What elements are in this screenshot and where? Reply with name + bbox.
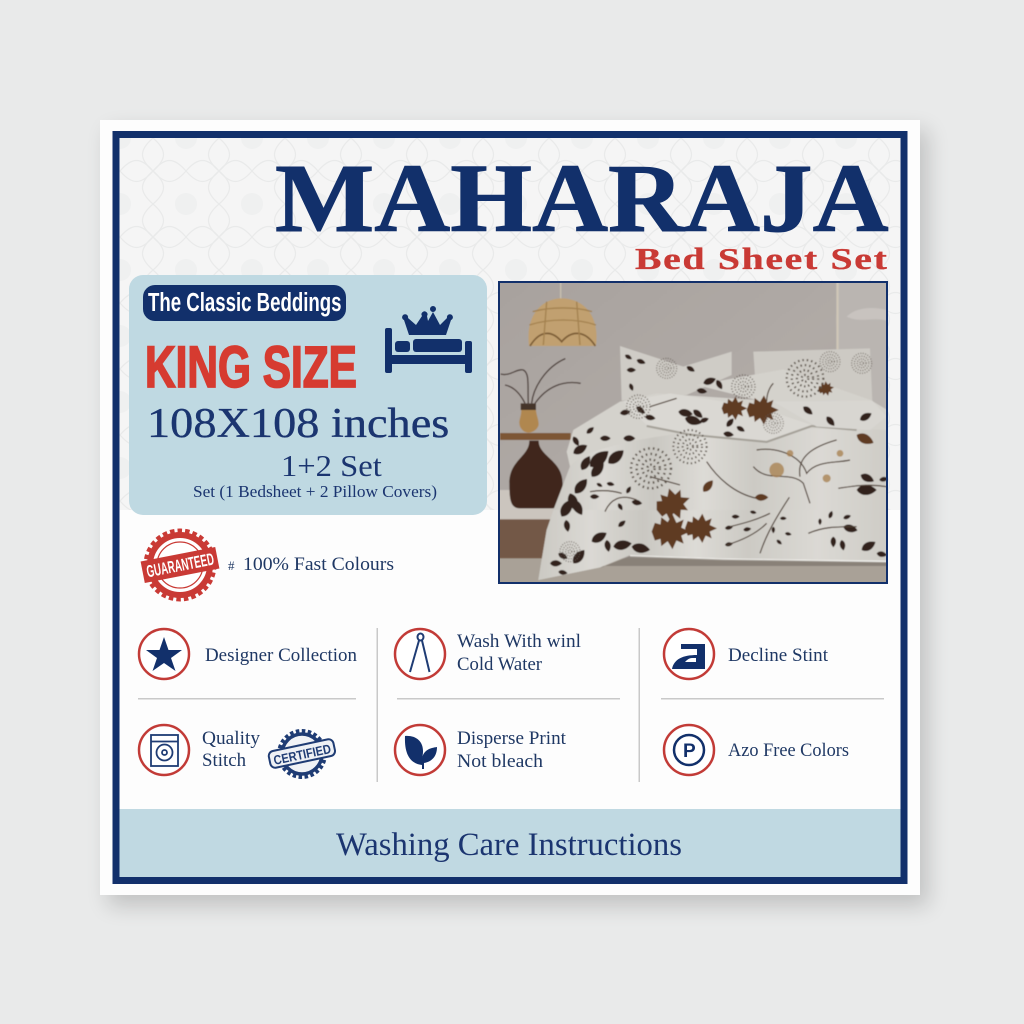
feature: decline stint: Decline Stint <box>728 645 829 666</box>
card background <box>100 120 920 895</box>
brand pill: The Classic Beddings <box>148 288 342 317</box>
king size heading: KING SIZE <box>145 334 357 400</box>
icon: certified stamp: CERTIFIED <box>272 741 333 768</box>
set quantity: 1+2 Set <box>281 449 382 483</box>
feature: disperse print <box>395 725 567 775</box>
icon: guaranteed stamp: GUARANTEED <box>145 549 216 581</box>
feature: quality stitch: Stitch <box>202 750 246 771</box>
navy frame <box>116 134 904 880</box>
card drop shadow <box>108 130 928 906</box>
set contents: Set (1 Bedsheet + 2 Pillow Covers) <box>193 482 437 501</box>
feature: designer collection <box>139 629 357 679</box>
icon: guaranteed stamp <box>141 531 219 599</box>
icon: crowned bed <box>385 306 472 373</box>
panel: size details <box>129 275 487 515</box>
feature grid dividers <box>138 628 884 782</box>
feature: decline stint <box>664 629 829 679</box>
feature: disperse print: Disperse Print <box>457 728 567 749</box>
fast colours text: # <box>228 558 235 573</box>
fast colours text: 100% Fast Colours <box>243 554 394 575</box>
feature: azo free colors: Azo Free Colors <box>728 740 849 761</box>
product photo: bed <box>498 281 889 584</box>
feature: disperse print: Not bleach <box>457 751 544 772</box>
feature: quality stitch <box>139 725 260 775</box>
dimensions: 108X108 inches <box>147 399 449 447</box>
icon: certified stamp <box>268 731 336 777</box>
footer band: care instructions <box>120 809 900 877</box>
footer band: care instructions: Washing Care Instructions <box>336 827 682 863</box>
subtitle: Bed Sheet Set <box>635 242 888 276</box>
infographic page <box>100 120 936 914</box>
feature: quality stitch: Quality <box>202 728 260 749</box>
feature: azo free colors <box>664 725 849 775</box>
feature: wash with cold water: Wash With winl <box>457 631 581 652</box>
feature: wash with cold water <box>395 629 581 679</box>
feature: azo free colors: P <box>683 741 696 762</box>
feature: wash with cold water: Cold Water <box>457 654 543 675</box>
feature: designer collection: Designer Collection <box>205 645 357 666</box>
patterned header background <box>119 138 900 510</box>
title: MAHARAJA <box>275 143 889 252</box>
